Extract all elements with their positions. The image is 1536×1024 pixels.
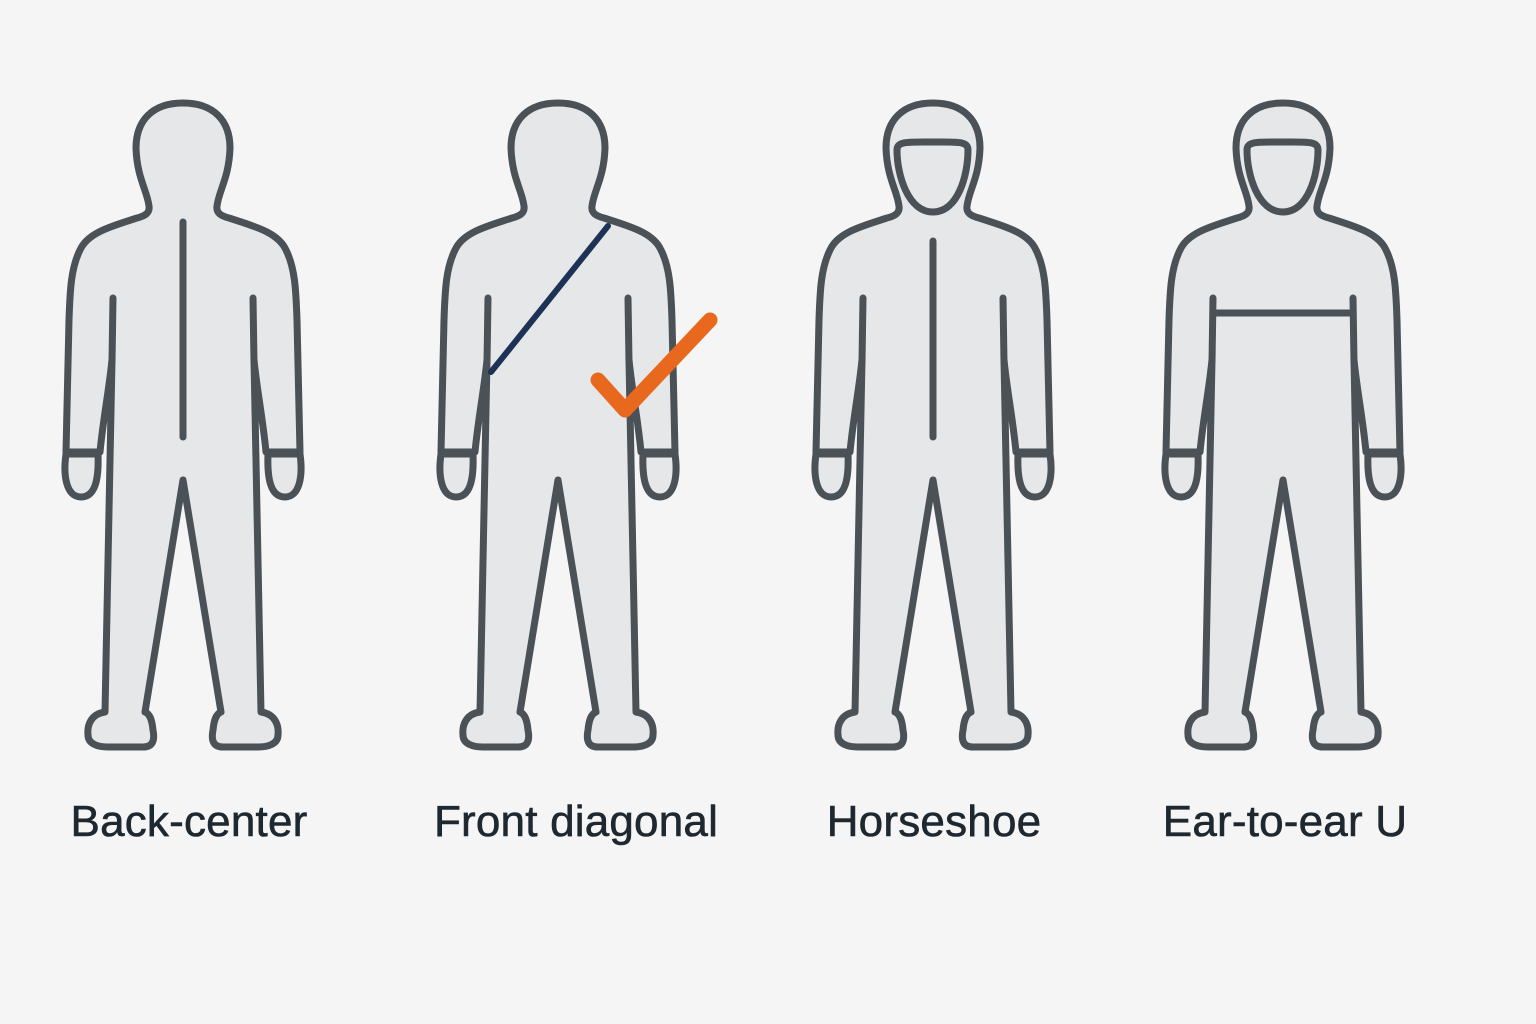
- label: horseshoe: Horseshoe: [827, 797, 1041, 846]
- diagonal zipper: [491, 226, 608, 372]
- figure: horseshoe suit: [815, 103, 1051, 747]
- figure: back-center suit: [65, 103, 301, 747]
- icon: orange check mark: [598, 320, 710, 410]
- figure: ear-to-ear U suit: [1165, 103, 1401, 747]
- figure: front diagonal suit: [440, 103, 710, 747]
- label: front diagonal: Front diagonal: [434, 797, 718, 846]
- label: ear-to-ear U: Ear-to-ear U: [1163, 797, 1407, 846]
- label: back-center: Back-center: [71, 797, 307, 846]
